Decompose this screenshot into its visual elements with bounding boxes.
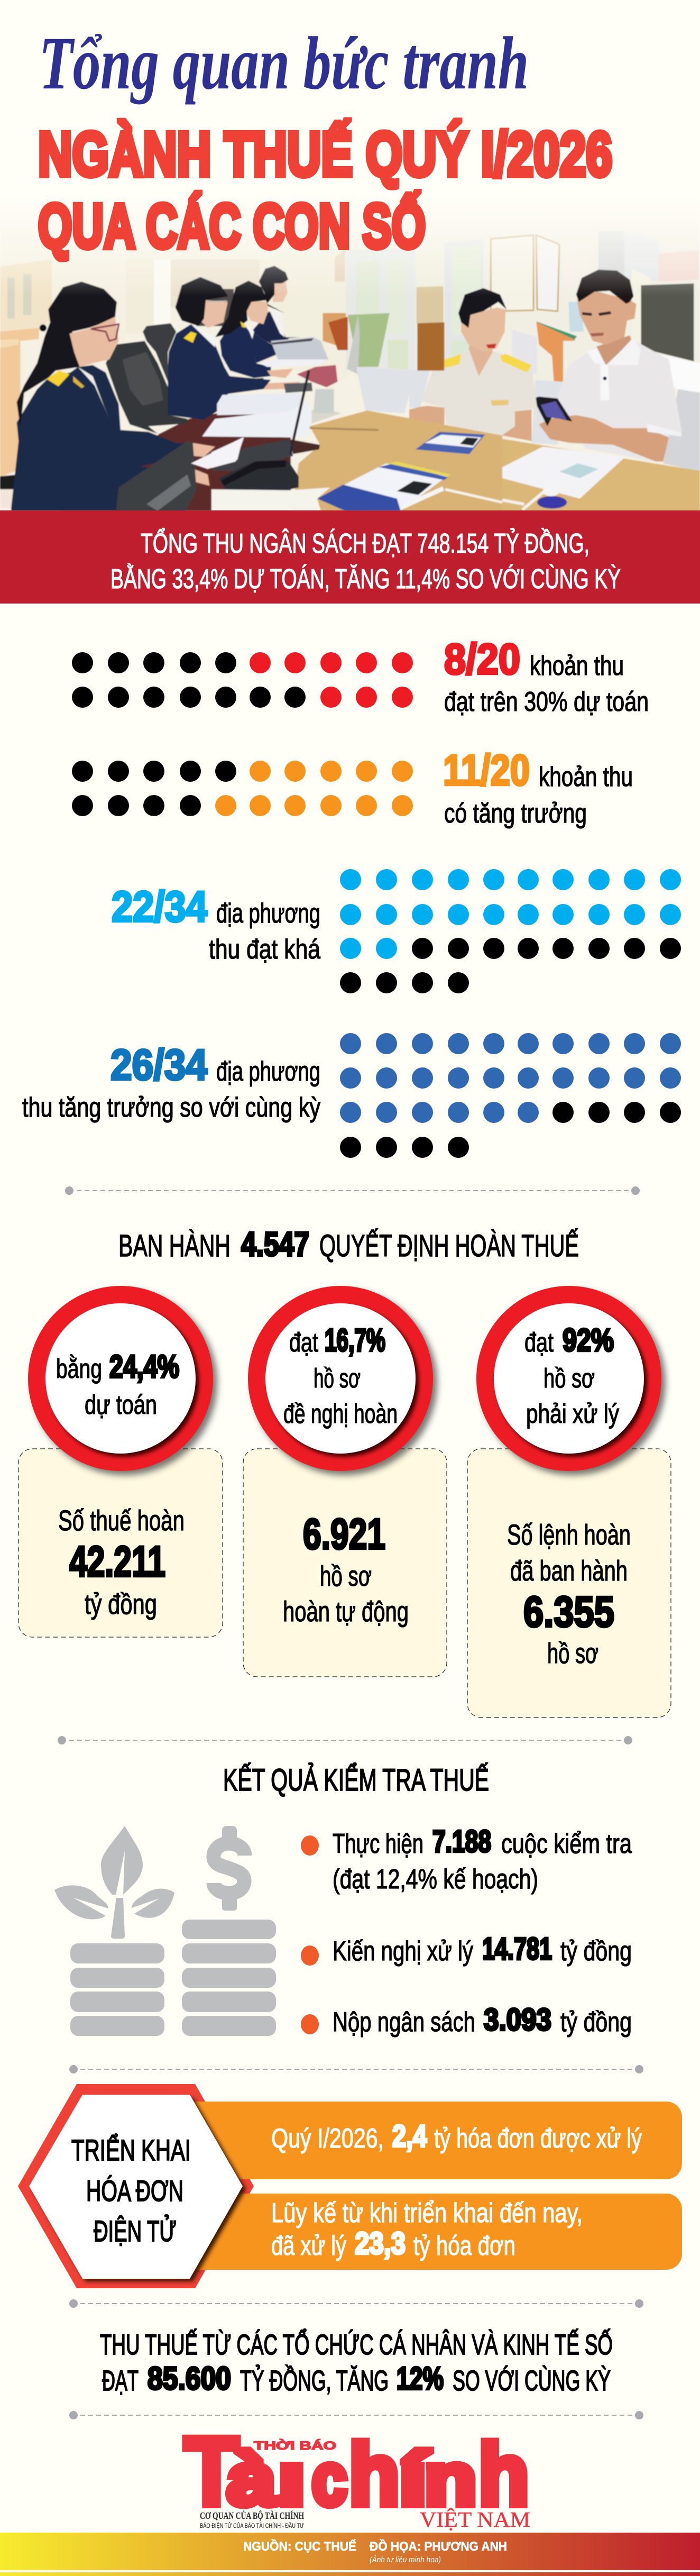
- footer band: source and credits: NGUỒN: CỤC THUẾ: [243, 2539, 356, 2554]
- heading: refund decisions: QUYẾT ĐỊNH HOÀN THUẾ: [319, 1229, 579, 1263]
- circle: 92% of files to process: đạt: [524, 1327, 554, 1357]
- heading: refund decisions: 4.547: [241, 1225, 309, 1263]
- monitor and foreground documents: [116, 395, 291, 511]
- stat text: 26/34: thu tăng trưởng so với cùng kỳ: [22, 1092, 320, 1123]
- photo: tax officers serving a taxpayer at the counter: [0, 231, 700, 510]
- card: refund orders issued: hồ sơ: [547, 1638, 598, 1669]
- stat text: 8/20: đạt trên 30% dự toán: [444, 687, 649, 717]
- stat text: 11/20: có tăng trưởng: [444, 798, 587, 829]
- bar: invoices processed in Q1: Quý I/2026,: [271, 2123, 384, 2154]
- circle: 16.7% of refund requests: đạt: [289, 1327, 318, 1357]
- card: refund orders issued: 6.355: [523, 1588, 614, 1636]
- bar: cumulative invoices processed: 23,3: [355, 2226, 406, 2261]
- card: automatic refund files: [243, 1449, 447, 1677]
- logo: Thời báo Tài chính Việt Nam: CƠ QUAN CỦA BỘ TÀI CHÍNH: [200, 2510, 304, 2521]
- logo: Thời báo Tài chính Việt Nam: h: [349, 2426, 400, 2524]
- bullet: paid to the budget: 3.093: [484, 2003, 551, 2037]
- bar: cumulative invoices processed: đã xử lý: [271, 2231, 346, 2261]
- photo top fade: [0, 196, 700, 296]
- circle: 24.4% of estimate: bằng: [56, 1354, 102, 1384]
- logo: Thời báo Tài chính Việt Nam: [184, 2416, 530, 2532]
- text: digital economy tax collection: [100, 2329, 613, 2397]
- circle: 24.4% of estimate: dự toán: [85, 1390, 157, 1420]
- man in white polo: [533, 269, 682, 462]
- circle: 92% of files to process: [476, 1286, 666, 1475]
- stat text: 26/34: địa phương: [216, 1056, 320, 1087]
- card: automatic refund files: 6.921: [303, 1510, 385, 1558]
- bullet: paid to the budget: [301, 2003, 632, 2038]
- stat text: 8/20: [444, 635, 649, 717]
- hexagon label: ĐIỆN TỬ: [94, 2214, 177, 2248]
- bar: invoices processed in Q1: 2,4: [392, 2119, 427, 2153]
- officer 1 in navy uniform: [11, 281, 215, 511]
- bullet: paid to the budget: tỷ đồng: [560, 2007, 632, 2038]
- stat text: 22/34: thu đạt khá: [209, 934, 320, 965]
- card: automatic refund files: hồ sơ: [320, 1560, 372, 1592]
- footer band: source and credits: ĐỒ HỌA: PHƯƠNG ANH: [370, 2539, 507, 2554]
- card: refunded tax amount: Số thuế hoàn: [58, 1505, 185, 1537]
- footer band: source and credits: (Ảnh tư liệu minh họa): [370, 2555, 441, 2564]
- bar: cumulative invoices processed: tỷ hóa đơn: [413, 2231, 515, 2261]
- stat text: 26/34: 26/34: [110, 1041, 207, 1089]
- dot chart: 8/20 revenue items: [72, 652, 413, 708]
- panel: e-invoice hexagon and bars: [18, 2084, 682, 2288]
- leather chairs: [106, 323, 187, 434]
- bullet: inspections carried out: [301, 1824, 632, 1895]
- card: refunded tax amount: [19, 1449, 223, 1637]
- text: digital economy tax collection: 12%: [397, 2361, 444, 2396]
- circle: 92% of files to process: phải xử lý: [526, 1399, 619, 1429]
- circle: 24.4% of estimate: 24,4%: [109, 1349, 179, 1384]
- circle: 24.4% of estimate: [28, 1286, 217, 1475]
- officer 3 in navy uniform: [215, 280, 300, 390]
- heading: refund decisions: [118, 1225, 579, 1263]
- heading: tax inspection results: KẾT QUẢ KIỂM TRA THUẾ: [223, 1763, 489, 1797]
- bullet: inspections carried out: (đạt 12,4% kế hoạch): [333, 1864, 538, 1895]
- text: digital economy tax collection: 85.600: [148, 2361, 231, 2396]
- text: digital economy tax collection: TỶ ĐỒNG, TĂNG: [240, 2365, 389, 2397]
- card: automatic refund files: hoàn tự động: [283, 1596, 409, 1628]
- logo: Thời báo Tài chính Việt Nam: VIỆT NAM: [420, 2507, 530, 2532]
- female officer in white shirt: [409, 288, 537, 441]
- title: main heading line 2: QUA CÁC CON SỐ: [38, 191, 426, 261]
- bar: cumulative invoices processed: Lũy kế từ khi triển khai đến nay,: [271, 2198, 583, 2228]
- stat text: 22/34: địa phương: [216, 898, 320, 929]
- stat text: 11/20: 11/20: [443, 746, 530, 794]
- bullet: inspections carried out: 7.188: [432, 1824, 491, 1859]
- logo: Thời báo Tài chính Việt Nam: à: [227, 2438, 277, 2520]
- officer 4 in navy uniform: [251, 266, 300, 346]
- bullet: proposed handling amount: [301, 1932, 632, 1967]
- card: refunded tax amount: 42.211: [69, 1538, 165, 1586]
- text: digital economy tax collection: SO VỚI CÙNG KỲ: [453, 2365, 611, 2397]
- dot chart: 26/34 localities: [340, 1033, 681, 1158]
- circle: 92% of files to process: hồ sơ: [544, 1363, 595, 1393]
- card: refund orders issued: [467, 1449, 671, 1718]
- logo: Thời báo Tài chính Việt Nam: BÁO ĐIỆN TỬ CỦA BÁO TÀI CHÍNH - ĐẦU TƯ: [200, 2522, 304, 2529]
- title: script line: Tổng quan bức tranh: [39, 21, 529, 105]
- dot chart: 22/34 localities: [340, 869, 681, 993]
- card: refund orders issued: Số lệnh hoàn: [507, 1519, 631, 1551]
- stat text: 22/34: [112, 883, 320, 965]
- bullet: paid to the budget: Nộp ngân sách: [333, 2007, 475, 2038]
- bullet: proposed handling amount: tỷ đồng: [560, 1936, 632, 1967]
- dot chart: 11/20 revenue items: [72, 761, 413, 816]
- circle: 16.7% of refund requests: [248, 1286, 437, 1475]
- bar: invoices processed in Q1: [193, 2102, 682, 2179]
- stat text: 11/20: [443, 746, 633, 829]
- stat text: 8/20: khoản thu: [530, 651, 624, 681]
- circle: 16.7% of refund requests: 16,7%: [325, 1322, 385, 1358]
- hexagon label: HÓA ĐƠN: [86, 2174, 183, 2207]
- stat text: 11/20: khoản thu: [539, 762, 633, 792]
- logo: Thời báo Tài chính Việt Nam: í: [399, 2437, 430, 2520]
- stat text: 22/34: 22/34: [112, 883, 207, 931]
- bar: invoices processed in Q1: tỷ hóa đơn được xử lý: [434, 2123, 642, 2154]
- hexagon label: [71, 2133, 191, 2248]
- circle: 16.7% of refund requests: hồ sơ: [314, 1363, 361, 1393]
- bullet: inspections carried out: Thực hiện: [333, 1829, 423, 1859]
- hexagon label: TRIỂN KHAI: [71, 2133, 191, 2167]
- desk documents and equipment: [211, 337, 330, 511]
- heading: refund decisions: BAN HÀNH: [118, 1229, 231, 1263]
- footer band: source and credits: [0, 2533, 700, 2576]
- icon: plant and dollar on coin stacks: [54, 1826, 276, 2036]
- stat text: 8/20: 8/20: [444, 635, 520, 683]
- bullet: proposed handling amount: 14.781: [482, 1932, 552, 1966]
- logo: Thời báo Tài chính Việt Nam: THỜI BÁO: [254, 2439, 336, 2452]
- logo: Thời báo Tài chính Việt Nam: i: [278, 2437, 306, 2520]
- officer 2 in navy uniform: [167, 276, 264, 420]
- bullet: inspections carried out: cuộc kiểm tra: [501, 1829, 632, 1859]
- logo: Thời báo Tài chính Việt Nam: n: [425, 2437, 476, 2520]
- circle: 92% of files to process: 92%: [563, 1322, 614, 1358]
- circle: 16.7% of refund requests: đề nghị hoàn: [283, 1399, 398, 1429]
- red banner: total budget revenue: [0, 510, 700, 604]
- card: refunded tax amount: tỷ đồng: [85, 1588, 157, 1620]
- logo: Thời báo Tài chính Việt Nam: T: [184, 2416, 239, 2526]
- logo: Thời báo Tài chính Việt Nam: c: [312, 2437, 347, 2520]
- bullet: proposed handling amount: Kiến nghị xử lý: [333, 1936, 473, 1967]
- logo: Thời báo Tài chính Việt Nam: h: [478, 2426, 529, 2524]
- text: digital economy tax collection: ĐẠT: [102, 2365, 139, 2397]
- card: refund orders issued: đã ban hành: [510, 1555, 628, 1587]
- bar: cumulative invoices processed: [193, 2194, 682, 2270]
- stat text: 26/34: [22, 1041, 320, 1123]
